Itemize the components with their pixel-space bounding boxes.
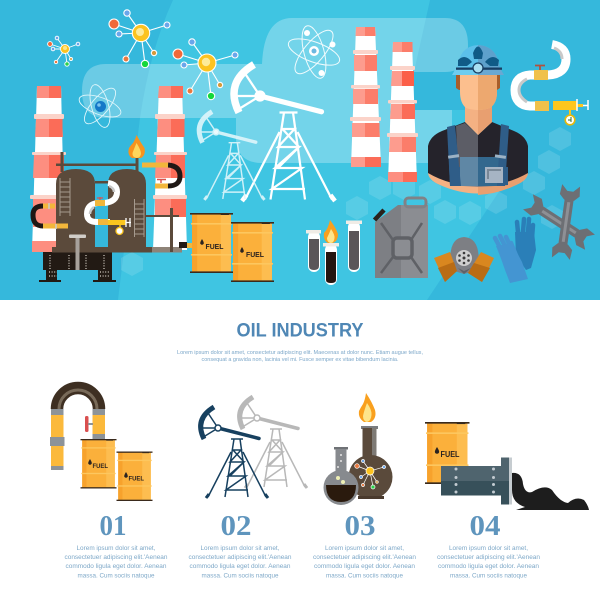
intro text — [177, 350, 423, 363]
refinery: tanks — [52, 152, 182, 252]
chimney: tall back — [350, 27, 381, 167]
step 4 text: massa. Cum sociis natoque — [450, 572, 527, 580]
worker: engineer bust — [428, 45, 528, 195]
refinery: ladders — [60, 178, 144, 237]
step 1 text: consectetuer adipiscing elit.'Aenean — [64, 554, 168, 561]
molecule: large right — [173, 39, 238, 100]
barrel: step 1 right: FUEL — [128, 476, 144, 482]
step 3 text: massa. Cum sociis natoque — [326, 572, 403, 580]
step 1 text: commodo ligula eget dolor. Aenean — [66, 563, 167, 570]
barrel: step 4 — [425, 421, 470, 484]
front glove — [495, 236, 528, 283]
molecule: small — [48, 36, 80, 66]
barrel: fuel two: FUEL — [246, 250, 264, 259]
step 2 text: massa. Cum sociis natoque — [202, 572, 279, 580]
icon: refinery flame — [128, 135, 145, 158]
icon: atom right — [285, 23, 343, 81]
chimney: beside factory — [153, 86, 187, 250]
step 1 text: Lorem ipsum dolor sit amet, — [76, 545, 156, 552]
icon: atom left — [76, 83, 124, 129]
icon: jerrycan — [374, 198, 428, 278]
refinery: valve — [69, 234, 86, 270]
icon: flame — [359, 393, 376, 422]
icon: blue gloves — [495, 219, 536, 283]
step 1 text: massa. Cum sociis natoque — [78, 572, 155, 580]
barrel: step 4: FUEL — [440, 450, 460, 459]
factory: oil refinery — [33, 152, 192, 282]
step 4 text: consectetuer adipiscing elit.'Aenean — [437, 554, 540, 561]
step 4 text — [437, 545, 540, 580]
step 2 illustration: pumpjacks — [201, 397, 307, 498]
icon: right pipeline with gauge — [515, 44, 588, 125]
step 3 illustration: flasks — [324, 393, 392, 505]
worker: dark shirt — [428, 122, 528, 186]
step 1 illustration: pipe and barrels — [50, 388, 152, 501]
pipe — [441, 458, 512, 504]
icon: gas mask — [434, 237, 494, 282]
pumpjack: small white — [199, 112, 264, 200]
step 3 text: commodo ligula eget dolor. Aenean — [314, 563, 415, 570]
worker: hair — [456, 74, 500, 90]
step 2 text — [188, 545, 292, 580]
heading: oil industry: OIL INDUSTRY — [236, 320, 364, 342]
pipe arch — [50, 388, 105, 470]
step 2 text: consectetuer adipiscing elit.'Aenean — [188, 554, 292, 561]
background: blue banner — [0, 0, 600, 300]
step 2 text: Lorem ipsum dolor sit amet, — [200, 545, 280, 552]
step 3 text: Lorem ipsum dolor sit amet, — [325, 545, 404, 552]
step 2 text: commodo ligula eget dolor. Aenean — [190, 563, 291, 570]
background: diagonal lighter band — [118, 0, 510, 300]
pumpjack: big white — [234, 64, 335, 201]
pumpjack: grey — [240, 397, 307, 488]
step 1 text — [64, 545, 168, 580]
barrel: fuel one — [190, 212, 233, 273]
barrel: fuel one: FUEL — [206, 242, 224, 251]
barrel: step 1 left: FUEL — [92, 463, 108, 470]
step 3 number: 03 — [344, 510, 376, 542]
step 1 number: 01 — [100, 510, 126, 542]
background: white lower panel — [0, 300, 600, 600]
intro text: consequat a gravida non, lacinia vel mi. Fusce semper ex vitae bibendum lacinia. — [202, 357, 398, 363]
chimney: short back — [387, 42, 418, 182]
icon: test tubes with flame — [306, 220, 362, 285]
refinery: feet and flanges — [39, 252, 116, 282]
intro text: Lorem ipsum dolor sit amet, consectetur adipiscing elit. Maecenas at dolor nunc. Etiam augue tellus, — [177, 350, 423, 356]
worker: helmet — [452, 45, 504, 75]
worker: overalls — [447, 124, 509, 186]
pumpjack: navy — [201, 407, 268, 498]
refinery: right dark pipe — [142, 165, 180, 186]
worker: face — [460, 74, 497, 110]
step 3 text: consectetuer adipiscing elit.'Aenean — [313, 554, 416, 561]
step 4 number: 04 — [470, 510, 500, 542]
flask: small grey — [324, 447, 358, 505]
flask: big with molecule — [348, 426, 392, 499]
chimney: far left — [30, 86, 66, 252]
worker: skin torso — [428, 172, 528, 194]
refinery: S pipe — [87, 183, 131, 234]
molecule: large left — [109, 10, 170, 68]
background: translucent clouds — [82, 18, 468, 163]
worker: neck — [465, 100, 492, 135]
back glove — [515, 219, 536, 270]
refinery: left dark pipe — [33, 203, 68, 229]
step 2 number: 02 — [220, 510, 252, 542]
oil spill — [512, 473, 589, 510]
step 4 text: Lorem ipsum dolor sit amet, — [449, 545, 528, 552]
step 4 text: commodo ligula eget dolor. Aenean — [438, 563, 539, 570]
barrel: fuel two — [231, 221, 274, 282]
step 3 text — [313, 545, 416, 580]
background: hexagon pattern — [121, 127, 571, 276]
refinery: outlet connector — [179, 242, 192, 248]
step 4 illustration: barrel, pipe and oil spill — [425, 421, 589, 510]
icon: crossed wrenches — [523, 184, 595, 260]
